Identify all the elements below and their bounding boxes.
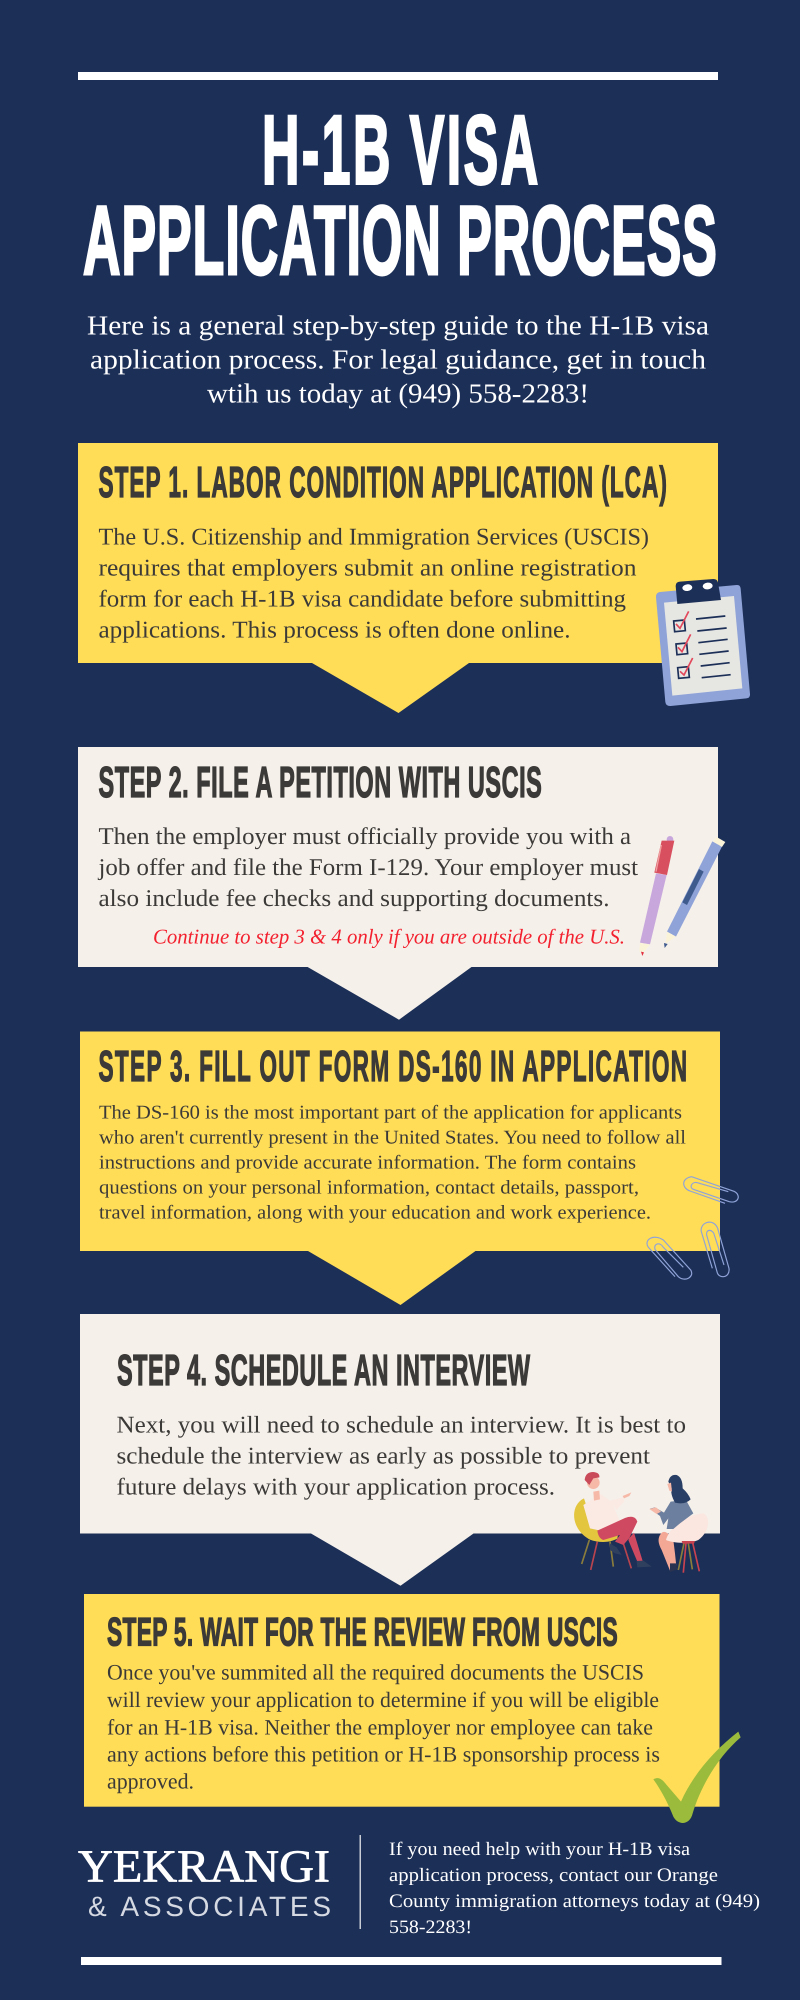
footer text: County immigration attorneys today at (949): [389, 1891, 760, 1912]
footer text: application process, contact our Orange: [389, 1865, 718, 1886]
step 1 body: [98, 524, 649, 644]
footer text: 558-2283!: [389, 1917, 472, 1938]
top white bar: [78, 72, 718, 80]
logo: Yekrangi & Associates: [78, 1841, 331, 1922]
footer text: [389, 1839, 760, 1938]
icon: clipboard: [656, 579, 750, 706]
red note: Continue to step 3 & 4 only if you are outside of the U.S.: [153, 924, 625, 948]
logo: Yekrangi & Associates: YEKRANGI: [78, 1841, 330, 1892]
step 5 body: any actions before this petition or H-1B sponsorship process is: [107, 1742, 660, 1766]
title: [83, 94, 717, 295]
intro text: application process. For legal guidance, get in touch: [90, 344, 706, 374]
logo: Yekrangi & Associates: & ASSOCIATES: [88, 1891, 331, 1922]
step 1 body: requires that employers submit an online registration: [98, 556, 636, 582]
step 1 body: applications. This process is often done online.: [98, 618, 570, 644]
step 2 box with arrow: [78, 747, 718, 1020]
intro text: [87, 310, 709, 408]
title: H-1B VISA: [262, 94, 538, 204]
step 3 body: The DS-160 is the most important part of the application for applicants: [99, 1102, 682, 1124]
step 4 heading: STEP 4. SCHEDULE AN INTERVIEW: [117, 1347, 531, 1395]
intro text: wtih us today at (949) 558-2283!: [207, 378, 589, 408]
step 4 box with arrow: [80, 1314, 720, 1586]
footer divider: [360, 1835, 361, 1929]
intro text: Here is a general step-by-step guide to the H-1B visa: [87, 310, 709, 340]
step 1 heading: STEP 1. LABOR CONDITION APPLICATION (LCA): [98, 459, 667, 507]
icon: two people talking: [574, 1472, 708, 1573]
step 5 body: will review your application to determine if you will be eligible: [107, 1687, 659, 1712]
step 2 heading: STEP 2. FILE A PETITION WITH USCIS: [98, 759, 542, 807]
step 2 body: [97, 824, 638, 912]
step 5 body: for an H-1B visa. Neither the employer nor employee can take: [107, 1714, 653, 1740]
panel: step 3: [80, 1032, 720, 1305]
panel: step 4: [80, 1314, 720, 1586]
panel: step 1: [78, 443, 718, 713]
step 4 body: [116, 1412, 686, 1500]
step 3 box with arrow: [80, 1032, 720, 1305]
step 1 body: form for each H-1B visa candidate before submitting: [98, 586, 626, 612]
bottom white bar: [81, 1957, 722, 1965]
step 1 body: The U.S. Citizenship and Immigration Services (USCIS): [98, 524, 649, 550]
step 5 box: [84, 1594, 720, 1807]
step 4 body: Next, you will need to schedule an interview. It is best to: [116, 1412, 686, 1438]
step 3 body: instructions and provide accurate information. The form contains: [99, 1152, 636, 1174]
panel: step 2: [78, 747, 718, 1020]
step 3 body: questions on your personal information, contact details, passport,: [99, 1178, 639, 1198]
step 4 body: schedule the interview as early as possible to prevent: [116, 1444, 650, 1470]
step 5 heading: STEP 5. WAIT FOR THE REVIEW FROM USCIS: [107, 1610, 618, 1654]
icon: pens: [639, 836, 725, 956]
step 3 body: who aren't currently present in the United States. You need to follow all: [99, 1128, 687, 1148]
step 2 body: also include fee checks and supporting documents.: [98, 886, 610, 912]
step 5 body: [107, 1660, 660, 1794]
panel: step 5: [84, 1594, 720, 1807]
step 2 body: Then the employer must officially provide you with a: [98, 824, 631, 850]
step 4 body: future delays with your application process.: [116, 1474, 555, 1500]
step 3 heading: STEP 3. FILL OUT FORM DS-160 IN APPLICATION: [98, 1043, 687, 1091]
title: APPLICATION PROCESS: [83, 185, 717, 295]
step 1 box with arrow: [78, 443, 718, 713]
step 5 body: Once you've summited all the required documents the USCIS: [107, 1660, 644, 1684]
step 5 body: approved.: [107, 1768, 194, 1794]
step 3 body: [99, 1102, 687, 1224]
icon: paperclips: [647, 1177, 738, 1279]
icon: green check mark: [653, 1732, 741, 1823]
step 3 body: travel information, along with your education and work experience.: [99, 1202, 651, 1224]
step 2 body: job offer and file the Form I-129. Your employer must: [97, 855, 638, 881]
footer text: If you need help with your H-1B visa: [389, 1839, 691, 1860]
